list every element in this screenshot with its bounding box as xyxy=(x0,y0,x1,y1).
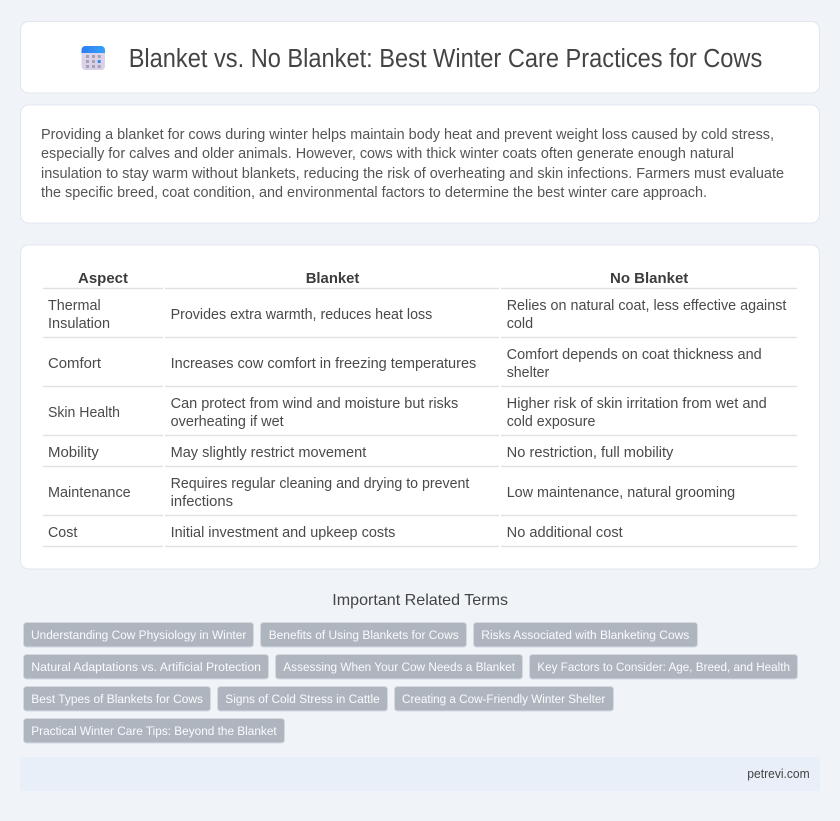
footer site name: petrevi.com xyxy=(747,767,810,781)
tag: key factors xyxy=(530,654,798,679)
row: maintenance: Maintenance xyxy=(48,485,131,501)
title: Blanket vs. No Blanket: Best Winter Care Practices for Cows xyxy=(129,45,762,73)
icon: calendar xyxy=(82,46,105,70)
row: skin health: cold exposure xyxy=(507,414,595,430)
tag: practical tips: Practical Winter Care Tips: Beyond the Blanket xyxy=(31,724,277,738)
table header row xyxy=(78,270,688,287)
row: mobility: No restriction, full mobility xyxy=(507,445,674,461)
tag: natural adaptations: Natural Adaptations vs. Artificial Protection xyxy=(31,660,261,674)
tag: assessing need: Assessing When Your Cow Needs a Blanket xyxy=(283,660,516,674)
tag: risks of blanketing xyxy=(474,622,698,647)
row: mobility xyxy=(48,445,674,461)
table header row: Aspect xyxy=(78,270,128,287)
text block: introduction paragraph: insulation to stay warm without blankets, reducing the risk of overheating and skin infections. Farmers must evaluate xyxy=(41,166,784,182)
row: maintenance xyxy=(48,476,735,510)
panel: introduction xyxy=(20,105,820,223)
row: skin health xyxy=(48,396,767,430)
tag: practical tips xyxy=(24,718,284,743)
heading: important related terms: Important Related Terms xyxy=(332,592,508,609)
row: comfort: Comfort xyxy=(48,356,101,372)
tag: best blanket types: Best Types of Blankets for Cows xyxy=(31,692,203,706)
row: skin health: overheating if wet xyxy=(171,414,284,430)
tag: cold stress signs: Signs of Cold Stress in Cattle xyxy=(225,692,380,706)
row: thermal insulation: cold xyxy=(507,316,533,332)
tag: assessing need xyxy=(276,654,522,679)
row: thermal insulation: Insulation xyxy=(48,316,110,332)
row: maintenance: Low maintenance, natural grooming xyxy=(507,485,735,501)
row: comfort: shelter xyxy=(507,365,549,381)
text block: introduction paragraph: Providing a blanket for cows during winter helps maintain body heat and prevent weight loss caused by cold stress, xyxy=(41,127,774,143)
panel: comparison table xyxy=(20,245,820,569)
row: comfort xyxy=(48,347,762,381)
tag: cold stress signs xyxy=(218,686,388,711)
tag: benefits of blankets xyxy=(260,622,466,647)
row: comfort: Increases cow comfort in freezing temperatures xyxy=(171,356,476,372)
row: skin health: Higher risk of skin irritation from wet and xyxy=(507,396,767,412)
tag: best blanket types xyxy=(24,686,210,711)
row: skin health: Skin Health xyxy=(48,405,120,421)
tag: risks of blanketing: Risks Associated with Blanketing Cows xyxy=(481,628,689,642)
text block: introduction paragraph xyxy=(41,127,784,201)
row: cost xyxy=(48,525,623,541)
table header row: No Blanket xyxy=(610,270,688,287)
row: mobility: May slightly restrict movement xyxy=(171,445,366,461)
tag: understanding cow physiology: Understanding Cow Physiology in Winter xyxy=(31,628,246,642)
row: thermal insulation xyxy=(48,298,786,332)
tag: key factors: Key Factors to Consider: Age, Breed, and Health xyxy=(537,660,790,674)
footer bar xyxy=(20,757,820,791)
row: maintenance: infections xyxy=(171,494,233,510)
table header row: Blanket xyxy=(306,270,359,287)
panel: title header xyxy=(20,22,820,93)
tag: benefits of blankets: Benefits of Using Blankets for Cows xyxy=(269,628,459,642)
tag: winter shelter xyxy=(394,686,614,711)
row: thermal insulation: Thermal xyxy=(48,298,101,314)
tag: natural adaptations xyxy=(24,654,268,679)
row: skin health: Can protect from wind and moisture but risks xyxy=(171,396,458,412)
row: cost: Initial investment and upkeep costs xyxy=(171,525,395,541)
row: mobility: Mobility xyxy=(48,445,100,461)
row: thermal insulation: Provides extra warmth, reduces heat loss xyxy=(171,307,432,323)
row: thermal insulation: Relies on natural coat, less effective against xyxy=(507,298,786,314)
row: cost: Cost xyxy=(48,525,77,541)
tag: winter shelter: Creating a Cow-Friendly Winter Shelter xyxy=(402,692,605,706)
text block: introduction paragraph: the specific breed, coat condition, and environmental factors to determine the best winter care approach. xyxy=(41,185,707,201)
row: cost: No additional cost xyxy=(507,525,623,541)
row: maintenance: Requires regular cleaning and drying to prevent xyxy=(171,476,469,492)
text block: introduction paragraph: especially for calves and older animals. However, cows with thick winter coats often generate enough natural xyxy=(41,146,734,162)
tag: understanding cow physiology xyxy=(24,622,254,647)
row: comfort: Comfort depends on coat thickness and xyxy=(507,347,762,363)
panel: related term tags xyxy=(24,622,798,743)
